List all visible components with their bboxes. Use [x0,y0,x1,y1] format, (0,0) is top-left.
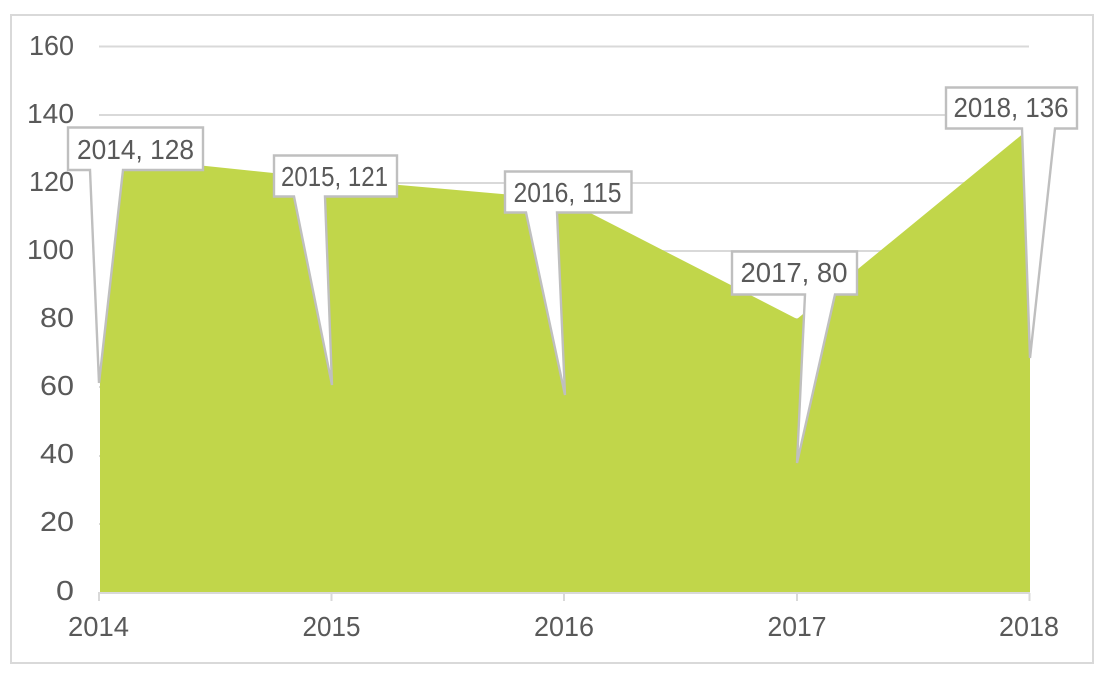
y axis labels: 20 [40,506,74,537]
callout: 2017, 80 [732,252,857,463]
callout: 2014, 128: 2014, 128 [77,134,194,165]
area series [100,128,1030,592]
y axis labels: 0 [56,575,74,606]
x axis labels: 2017 [768,611,826,642]
callout: 2016, 115: 2016, 115 [514,177,622,208]
callout: 2015, 121: 2015, 121 [281,161,388,192]
y axis labels [27,30,74,606]
x axis labels: 2015 [302,611,360,642]
y axis labels: 100 [27,234,74,265]
x axis labels: 2016 [534,611,594,642]
callout: 2017, 80: 2017, 80 [740,257,848,288]
x axis [98,593,1030,601]
y axis labels: 40 [40,438,74,469]
x axis labels: 2014 [68,611,129,642]
x axis labels [68,611,1059,642]
x axis labels: 2018 [999,611,1059,642]
y axis labels: 160 [29,30,74,61]
callout: 2018, 136: 2018, 136 [954,92,1068,123]
callout: 2018, 136 [946,88,1077,358]
y axis labels: 80 [40,302,74,333]
y axis labels: 60 [40,370,74,401]
callout: 2015, 121 [274,156,397,385]
y axis labels: 120 [29,166,74,197]
y axis labels: 140 [27,98,74,129]
callout: 2014, 128 [68,128,203,383]
callout: 2016, 115 [505,172,632,395]
